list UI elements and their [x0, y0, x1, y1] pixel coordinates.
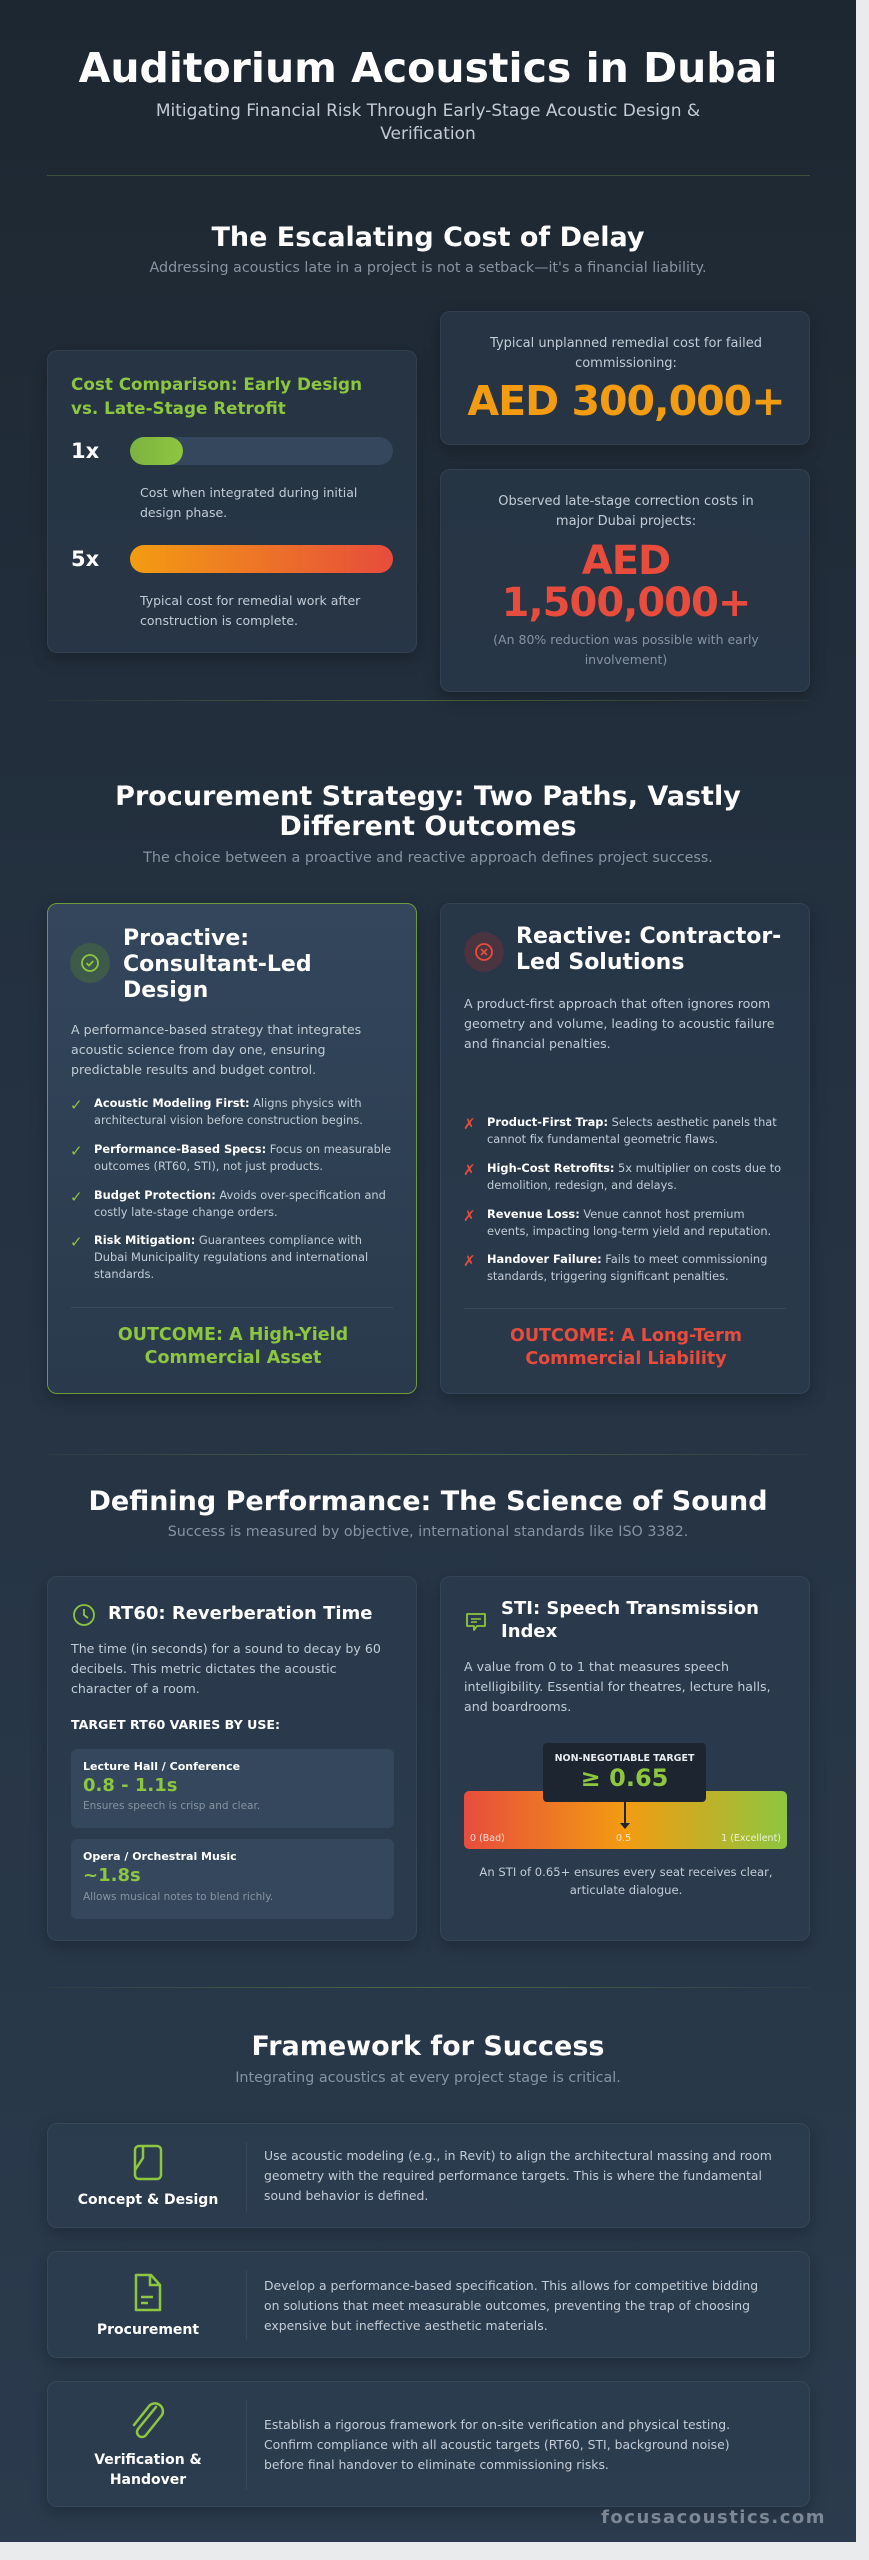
panel: proactive: ✓ — [70, 1096, 83, 1114]
note: (An 80% reduction was possible with early involvement) — [493, 632, 759, 667]
panel: proactive: ✓ — [70, 1142, 83, 1160]
bar 5x: 5x — [71, 547, 99, 571]
bullet list — [463, 1115, 781, 1283]
panel: 1.5M stat — [440, 469, 810, 692]
text: Develop a performance-based specification. This allows for competitive bidding on solutions that meet measurable outcomes, preventing the trap of choosing expensive but ineffective aesthetic materials. — [264, 2278, 758, 2333]
box: opera: Allows musical notes to blend richly. — [83, 1891, 273, 1903]
panel: reactive: ✗ — [463, 1207, 476, 1225]
panel heading: Proactive: Consultant-Led Design — [123, 926, 312, 1003]
box: opera: ~1.8s — [83, 1865, 141, 1886]
panel: proactive: ✓ — [70, 1233, 83, 1251]
description: A performance-based strategy that integrates acoustic science from day one, ensuring predictable results and budget control. — [71, 1022, 361, 1077]
panel heading: RT60: Reverberation Time — [108, 1603, 372, 1624]
label: Handover — [110, 2472, 186, 2488]
box: lecture hall — [71, 1749, 394, 1828]
panel: reactive: ✗ — [463, 1115, 476, 1133]
gauge chart — [464, 1743, 787, 1849]
callout: target — [543, 1743, 706, 1802]
panel: cost comparison — [47, 350, 417, 653]
gauge chart: 0.5 — [616, 1833, 631, 1844]
bullet list: Handover Failure: Fails to meet commissioning standards, triggering significant penalties. — [487, 1252, 767, 1283]
subheading: performance: Success is measured by objective, international standards like ISO 3382. — [168, 1524, 688, 1540]
panel: RT60 — [47, 1576, 417, 1941]
icon: clock — [73, 1604, 95, 1626]
subheading: procurement: The choice between a proactive and reactive approach defines project success. — [143, 850, 713, 866]
bar 1x: 1x — [71, 439, 99, 463]
heading: performance: Defining Performance: The Science of Sound — [88, 1486, 768, 1517]
subheading: cost: Addressing acoustics late in a project is not a setback—it's a financial liability. — [149, 260, 707, 276]
panel: proactive — [47, 903, 417, 1394]
label: Procurement — [97, 2322, 199, 2338]
stat value: AED — [582, 538, 670, 584]
bar 5x — [71, 545, 393, 573]
box: lecture hall: Ensures speech is crisp and clear. — [83, 1800, 260, 1812]
description: A value from 0 to 1 that measures speech intelligibility. Essential for theatres, lecture halls, and boardrooms. — [464, 1659, 771, 1714]
bar 1x — [71, 437, 393, 465]
bullet list — [70, 1096, 391, 1281]
text: Establish a rigorous framework for on-site verification and physical testing. Confirm compliance with all acoustic targets (RT60, STI, background noise) before final handover to eliminate commissioning risks. — [264, 2417, 730, 2472]
panel: reactive: ✗ — [463, 1161, 476, 1179]
panel: concept & design — [47, 2123, 810, 2228]
callout: target: NON-NEGOTIABLE TARGET — [555, 1753, 694, 1764]
footer: website: focusacoustics.com — [601, 2507, 826, 2528]
bullet list: Performance-Based Specs: Focus on measurable outcomes (RT60, STI), not just products. — [94, 1142, 391, 1173]
label: Concept & Design — [78, 2192, 218, 2208]
box: lecture hall: Lecture Hall / Conference — [83, 1760, 240, 1773]
stat value — [502, 538, 750, 626]
panel: proactive: Risk Mitigation: Guarantees compliance with Dubai Municipality regulations and international standards. — [94, 1233, 368, 1281]
subtitle: Mitigating Financial Risk Through Early-Stage Acoustic Design & Verification — [156, 101, 700, 144]
bullet list: Budget Protection: Avoids over-specification and costly late-stage change orders. — [94, 1188, 386, 1219]
label: target: TARGET RT60 VARIES BY USE: — [71, 1717, 280, 1732]
icon: speech bubble — [466, 1613, 486, 1631]
stat label: Observed late-stage correction costs in major Dubai projects: — [498, 494, 754, 529]
icon: x circle — [464, 932, 504, 972]
icon: paperclip — [132, 2402, 164, 2438]
panel heading: Reactive: Contractor-Led Solutions — [516, 924, 781, 975]
icon: document — [134, 2274, 162, 2312]
heading: cost of delay: The Escalating Cost of Delay — [211, 222, 645, 253]
icon: check circle — [70, 943, 110, 983]
text: 1x desc: Cost when integrated during initial design phase. — [140, 485, 357, 520]
stat value: AED 300,000+ — [467, 377, 785, 425]
icon: tablet — [134, 2144, 162, 2180]
panel heading: Cost Comparison: Early Design vs. Late-Stage Retrofit — [71, 374, 362, 418]
panel: reactive: ✗ — [463, 1252, 476, 1270]
gauge chart: 0 (Bad) — [470, 1833, 505, 1844]
title: Auditorium Acoustics in Dubai — [79, 44, 777, 92]
description: A product-first approach that often ignores room geometry and volume, leading to acoustic failure and financial penalties. — [464, 996, 775, 1051]
bullet list: Product-First Trap: Selects aesthetic panels that cannot fix fundamental geometric flaws. — [487, 1115, 777, 1146]
bullet list: Revenue Loss: Venue cannot host premium events, impacting long-term yield and reputation. — [487, 1207, 771, 1238]
text: Use acoustic modeling (e.g., in Revit) to align the architectural massing and room geometry with the required performance targets. This is where the fundamental sound behavior is defined. — [264, 2148, 772, 2203]
panel: reactive — [440, 903, 810, 1394]
outcome: OUTCOME: A Long-Term Commercial Liability — [510, 1326, 742, 1369]
panel: 300k stat — [440, 311, 810, 445]
bullet list: Acoustic Modeling First: Aligns physics with architectural vision before construction begins. — [94, 1096, 363, 1127]
stat value: 1,500,000+ — [502, 580, 750, 626]
panel heading: STI: Speech Transmission Index — [501, 1598, 759, 1642]
outcome: OUTCOME: A High-Yield Commercial Asset — [118, 1325, 348, 1368]
panel: proactive: ✓ — [70, 1188, 83, 1206]
box: lecture hall: 0.8 - 1.1s — [83, 1775, 178, 1796]
callout: target: ≥ 0.65 — [581, 1764, 668, 1792]
heading: framework: Framework for Success — [251, 2031, 604, 2062]
heading: procurement: Procurement Strategy: Two Paths, Vastly Different Outcomes — [115, 781, 741, 842]
panel: procurement — [47, 2251, 810, 2358]
gauge chart: 1 (Excellent) — [721, 1833, 781, 1844]
box: opera: Opera / Orchestral Music — [83, 1850, 237, 1863]
text: 5x desc: Typical cost for remedial work after construction is complete. — [140, 593, 360, 628]
label: Verification & — [94, 2452, 202, 2468]
label — [94, 2452, 202, 2488]
description: The time (in seconds) for a sound to decay by 60 decibels. This metric dictates the acoustic character of a room. — [71, 1641, 381, 1696]
bullet list: High-Cost Retrofits: 5x multiplier on costs due to demolition, redesign, and delays. — [487, 1161, 781, 1192]
box: opera — [71, 1839, 394, 1919]
subheading: framework: Integrating acoustics at every project stage is critical. — [235, 2070, 621, 2086]
panel: STI — [440, 1576, 810, 1941]
caption: An STI of 0.65+ ensures every seat receives clear, articulate dialogue. — [479, 1865, 773, 1897]
arrow — [620, 1802, 630, 1829]
stat label: Typical unplanned remedial cost for failed commissioning: — [490, 336, 762, 371]
panel: verification — [47, 2381, 810, 2507]
